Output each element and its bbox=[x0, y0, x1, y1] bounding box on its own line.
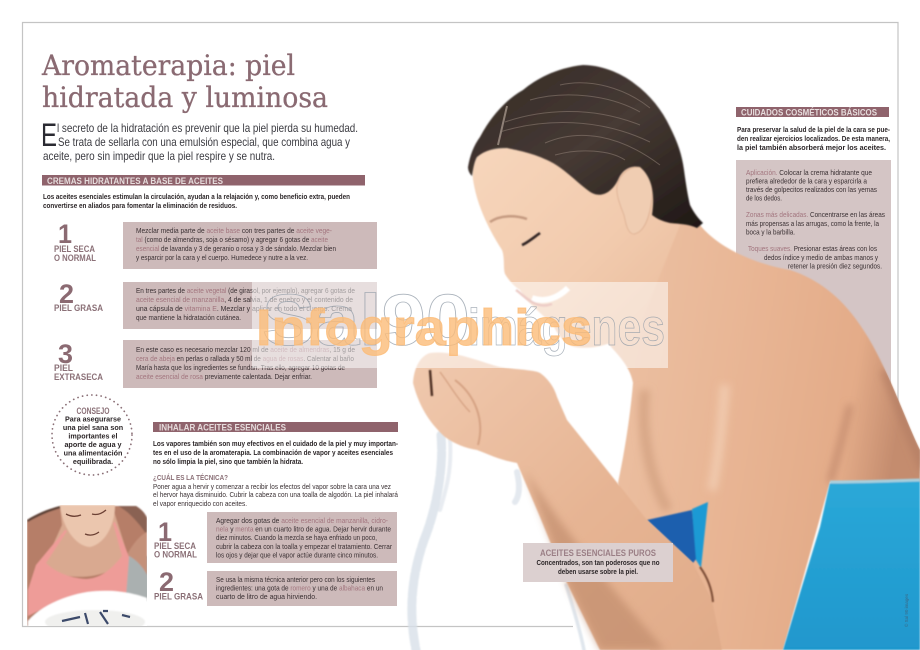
inhalar intro text: tes en el uso de la aromaterapia. La combinación de vapor y aceites esenciales bbox=[153, 448, 393, 457]
small towel fold bbox=[647, 502, 708, 568]
technique text: ¿CUÁL ES LA TÉCNICA? bbox=[153, 473, 228, 482]
water splash bbox=[412, 435, 584, 650]
inhalation 2: piel grasa: cuarto de litro de agua hirviendo. bbox=[216, 592, 317, 601]
inhalation 2: piel grasa: Se usa la misma técnica anterior pero con los siguientes bbox=[216, 575, 375, 584]
inhalation 2: piel grasa: PIEL GRASA bbox=[154, 592, 203, 602]
row 3: piel extraseca: cera de abeja en perlas o rallada y 50 ml de agua de rosas. Calentar al baño bbox=[136, 354, 354, 363]
callout: consejo: importantes el bbox=[68, 432, 118, 440]
intro text: l secreto de la hidratación es prevenir que la piel pierda su humedad. bbox=[57, 121, 358, 135]
callout: consejo: una piel sana son bbox=[63, 423, 123, 432]
cuidados tips box: través de golpecitos realizados con las yemas bbox=[746, 185, 877, 194]
photo: woman over steam bowl bbox=[27, 505, 148, 634]
cuidados tips box: retener la presión diez segundos. bbox=[788, 262, 882, 270]
row 3: piel extraseca: EXTRASECA bbox=[54, 372, 103, 382]
row 1: piel seca o normal: y esparcir por la cara y el cuerpo. Humedece y nutre a la vez. bbox=[136, 253, 308, 262]
cuidados intro: la piel también absorberá mejor los aceites. bbox=[737, 143, 886, 152]
row 1: piel seca o normal bbox=[54, 219, 377, 269]
callout: aceites esenciales puros: deben usarse sobre la piel. bbox=[558, 567, 638, 576]
callout: aceites esenciales puros: ACEITES ESENCIALES PUROS bbox=[540, 548, 656, 558]
inhalation 2: piel grasa: ingredientes: una gota de romero y una de albahaca en un bbox=[216, 584, 383, 592]
row 1: piel seca o normal: Mezclar media parte de aceite base con tres partes de aceite vege- bbox=[136, 226, 333, 235]
cuidados tips box: Zonas más delicadas. Concentrarse en las áreas bbox=[746, 210, 885, 219]
inhalation 1: piel seca o normal: O NORMAL bbox=[154, 550, 197, 560]
technique text: el hervor haya disminuido. Cubrir la cabeza con una toalla de algodón. La piel inhalará bbox=[153, 490, 398, 499]
facial features bbox=[490, 216, 568, 305]
row 2: piel grasa bbox=[54, 279, 377, 329]
row 3: piel extraseca: PIEL bbox=[54, 363, 73, 373]
heading: inhalar aceites bbox=[153, 422, 398, 432]
row 3: piel extraseca: María hasta que los ingredientes se fundan. Tras ello, agregar 10 gotas de bbox=[136, 363, 345, 372]
cuidados tips box: más propensas a las arrugas, como la frente, la bbox=[746, 219, 879, 228]
torso and head skin bbox=[605, 180, 920, 650]
cremas intro text bbox=[43, 192, 350, 210]
watermark: Infographics bbox=[256, 299, 592, 356]
heading: inhalar aceites: INHALAR ACEITES ESENCIALES bbox=[159, 422, 286, 432]
cuidados tips box: de los dedos. bbox=[746, 194, 782, 202]
cuidados intro: Para preservar la salud de la piel de la cara se pue- bbox=[737, 125, 891, 134]
inhalation 1: piel seca o normal: los ojos y dejar que el vapor actúe durante cinco minutos. bbox=[216, 550, 378, 560]
watermark: imágenes bbox=[468, 299, 665, 357]
inhalation 1: piel seca o normal: PIEL SECA bbox=[154, 541, 196, 551]
row 2: piel grasa: PIEL GRASA bbox=[54, 303, 103, 313]
row 2: piel grasa: una cápsula de vitamina E. Mezclar y aplicar en todo el cuerpo. Crema bbox=[136, 304, 352, 313]
inhalation 1: piel seca o normal: Agregar dos gotas de aceite esencial de manzanilla, cidro- bbox=[216, 516, 389, 525]
inhalation 1: piel seca o normal: diez minutos. Cuando la mezcla se haya enfriado un poco, bbox=[216, 533, 377, 542]
row 2: piel grasa: que mantiene la hidratación cutánea. bbox=[136, 313, 241, 322]
row 1: piel seca o normal: esencial de lavanda y 3 de geranio o rosa y 3 de sándalo. Mezclar bien bbox=[136, 244, 336, 253]
callout: aceites esenciales puros bbox=[523, 543, 673, 582]
hair bbox=[468, 65, 703, 228]
row 2: piel grasa: aceite esencial de manzanilla, 4 de salvia, 1 de enebro y el contenido de bbox=[136, 295, 353, 304]
arm and finger creases bbox=[430, 370, 713, 602]
title: Aromaterapia: piel bbox=[41, 49, 295, 82]
heading: cremas hidratantes: CREMAS HIDRATANTES A BASE DE ACEITES bbox=[47, 176, 223, 186]
inhalar intro text bbox=[153, 439, 399, 466]
technique text: el vapor enriquecido con aceites. bbox=[153, 499, 247, 508]
cuidados tips box: dedos índice y medio de ambas manos y bbox=[764, 253, 878, 262]
heading: cuidados: CUIDADOS COSMÉTICOS BÁSICOS bbox=[741, 108, 877, 118]
callout: consejo: una alimentación bbox=[64, 448, 122, 458]
row 3: piel extraseca: aceite esencial de rosa previamente calentada. Dejar enfriar. bbox=[136, 372, 312, 381]
row 1: piel seca o normal: 1 bbox=[58, 219, 72, 249]
torso shading bbox=[644, 370, 920, 510]
near forearm shadow bbox=[525, 470, 665, 650]
technique text bbox=[153, 473, 398, 508]
photo credit: © Sal 90 images bbox=[903, 593, 909, 627]
panel: cuidados cosméticos básicos bbox=[736, 107, 891, 390]
cuidados tips box: boca y la barbilla. bbox=[746, 228, 795, 236]
cuidados tips box: Aplicación. Colocar la crema hidratante que bbox=[746, 168, 872, 177]
row 3: piel extraseca: 3 bbox=[58, 339, 73, 369]
row 1: piel seca o normal: PIEL SECA bbox=[54, 244, 95, 254]
inhalar intro text: Los vapores también son muy efectivos en el cuidado de la piel y muy importan- bbox=[153, 439, 399, 448]
watermark: Sal90 bbox=[262, 281, 470, 361]
cuidados tips box: prefiera alrededor de la cara y esparcirla a bbox=[746, 176, 867, 186]
row 3: piel extraseca bbox=[54, 339, 377, 388]
row 2: piel grasa: 2 bbox=[59, 279, 74, 309]
ear bbox=[617, 167, 653, 234]
callout: consejo: aporte de agua y bbox=[64, 440, 122, 449]
cremas intro text: convertirse en aliados para fomentar la eliminación de residuos. bbox=[43, 201, 237, 210]
callout: consejo bbox=[52, 395, 132, 475]
row 2: piel grasa: En tres partes de aceite vegetal (de girasol, por ejemplo), agregar 6 gotas de bbox=[136, 286, 355, 295]
callout: consejo: equilibrada. bbox=[73, 457, 113, 466]
face bbox=[472, 140, 680, 348]
callout: aceites esenciales puros: Concentrados, son tan poderosos que no bbox=[536, 558, 660, 567]
towel bbox=[783, 480, 920, 650]
callout: consejo: Para asegurarse bbox=[65, 414, 121, 424]
photo: woman washing her face bbox=[412, 65, 920, 650]
heading: cremas hidratantes bbox=[42, 175, 365, 186]
hands and forearms bbox=[413, 353, 722, 650]
watermark bbox=[252, 281, 668, 368]
inhalation 1: piel seca o normal bbox=[154, 512, 397, 563]
intro text: E bbox=[41, 117, 57, 153]
cuidados tips box bbox=[736, 160, 891, 390]
cremas intro text: Los aceites esenciales estimulan la circulación, ayudan a la relajación y, como beneficio extra, pueden bbox=[43, 192, 350, 201]
cuidados intro: den realizar ejercicios localizados. De esta manera, bbox=[737, 134, 890, 143]
cuidados intro bbox=[737, 125, 891, 152]
technique text: Poner agua a hervir y comenzar a recibir los efectos del vapor sobre la cara una vez bbox=[153, 482, 391, 491]
cuidados tips box: Toques suaves. Presionar estas áreas con los bbox=[748, 244, 877, 253]
inhalation 1: piel seca o normal: 1 bbox=[158, 517, 172, 547]
callout: consejo: CONSEJO bbox=[76, 406, 110, 416]
intro text: Se trata de sellarla con una emulsión especial, que combina agua y bbox=[58, 135, 350, 149]
inhalar intro text: no sólo limpia la piel, sino que también la hidrata. bbox=[153, 457, 303, 466]
inhalation 1: piel seca o normal: nela y menta en un cuarto litro de agua. Dejar hervir durante bbox=[216, 524, 391, 534]
title: hidratada y luminosa bbox=[42, 81, 328, 114]
intro text bbox=[41, 117, 358, 163]
intro text: aceite, pero sin impedir que la piel respire y se nutra. bbox=[43, 149, 275, 163]
inhalation 2: piel grasa: 2 bbox=[159, 567, 174, 597]
inhalation 1: piel seca o normal: cubrir la cabeza con la toalla y empezar el tratamiento. Cerrar bbox=[216, 542, 393, 551]
title bbox=[41, 49, 328, 114]
row 1: piel seca o normal: O NORMAL bbox=[54, 253, 96, 263]
hair highlights bbox=[498, 83, 660, 165]
row 3: piel extraseca: En este caso es necesario mezclar 120 ml de aceite de almendras, 15 g de bbox=[136, 345, 355, 354]
inhalation 2: piel grasa bbox=[154, 567, 397, 606]
row 1: piel seca o normal: tal (como de almendras, soja o sésamo) y agregar 6 gotas de aceite bbox=[136, 235, 328, 244]
